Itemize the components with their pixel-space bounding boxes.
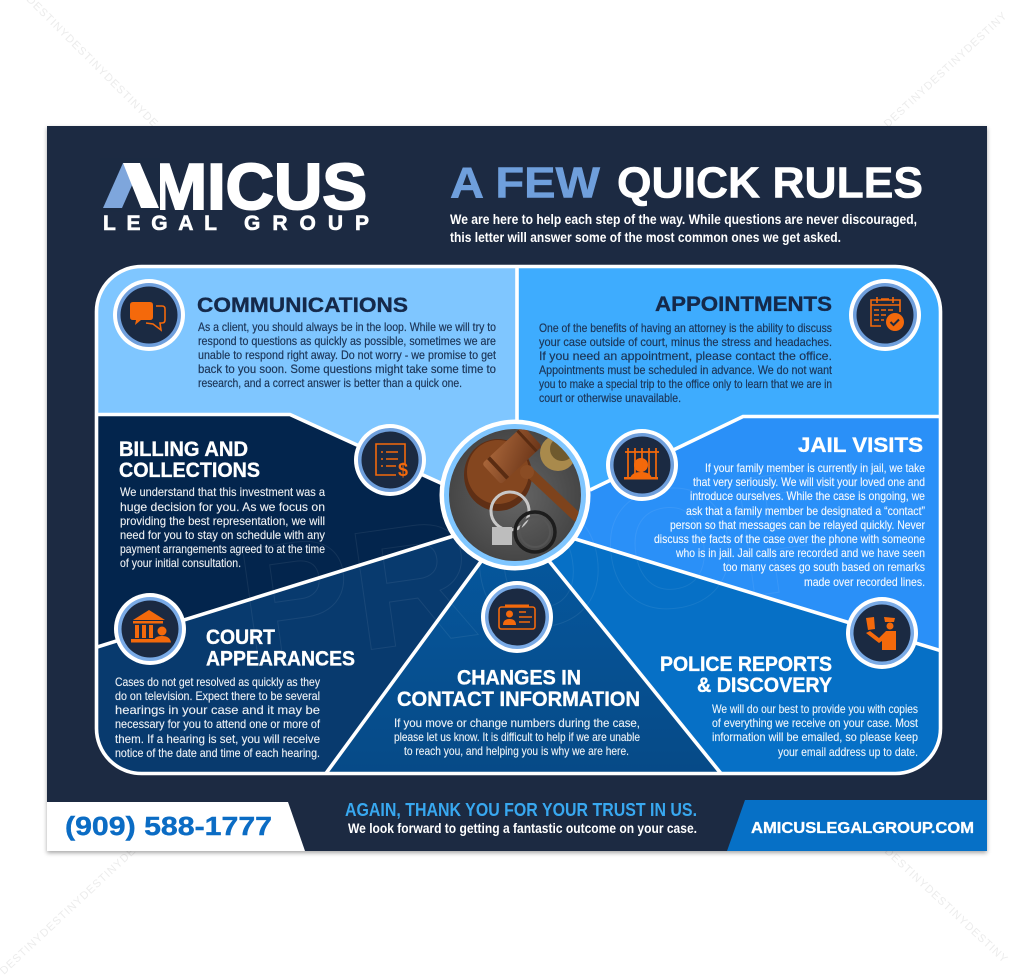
section: police reports and discovery: We will do our best to provide you with copies — [712, 702, 918, 716]
section: communications: respond to questions as quickly as possible, sometimes we are — [198, 334, 496, 348]
watermark: proof: PROOF — [227, 431, 852, 703]
section: appointments: One of the benefits of having an attorney is the ability to discuss — [539, 321, 832, 335]
section: jail visits: who is in jail. Jail calls are recorded and we have seen — [675, 546, 925, 560]
logo: Amicus Legal Group: GROUP — [244, 212, 369, 235]
watermark: destiny: DESTINYDESTINYDESTINYDESTINY — [0, 819, 166, 977]
subtitle: We are here to help each step of the way. While questions are never discouraged, — [450, 212, 917, 228]
section: police reports and discovery: POLICE REPORTS — [660, 653, 832, 676]
watermark: destiny: DESTINYDESTINYDESTINY — [882, 845, 1010, 966]
icon: invoice: $ — [398, 460, 408, 480]
panel: rules diagram — [90, 260, 950, 780]
section: jail visits: discuss the facts of the case over the phone with someone — [654, 532, 925, 546]
section: police reports and discovery: your email address up to date. — [778, 745, 918, 759]
section: police reports and discovery: & DISCOVERY — [697, 674, 832, 697]
section: communications: COMMUNICATIONS — [197, 294, 408, 317]
icon: police officer — [846, 597, 918, 669]
section: billing and collections: COLLECTIONS — [119, 459, 260, 482]
section: court appearances: COURT — [206, 626, 275, 649]
watermark: destiny: DESTINYDESTINYDESTINY — [882, 10, 1010, 130]
footer: thank you message: AGAIN, THANK YOU FOR YOUR TRUST IN US. — [345, 800, 697, 820]
section: jail visits: person so that messages can be relayed quickly. Never — [670, 518, 925, 532]
section: appointments: APPOINTMENTS — [655, 293, 832, 316]
subtitle: this letter will answer some of the most common ones we get asked. — [450, 230, 841, 246]
section: jail visits: ask that a family member be designated a “contact” — [686, 504, 925, 518]
section: billing and collections: payment arrangements agreed to at the time — [120, 542, 325, 556]
logo: Amicus Legal Group: AMICUS — [103, 150, 367, 223]
section: billing and collections: BILLING AND — [119, 438, 248, 461]
section: billing and collections: need for you to stay on schedule with any — [120, 528, 325, 542]
section: changes in contact information: If you move or change numbers during the case, — [394, 716, 640, 730]
poster background — [47, 126, 987, 851]
section: court appearances: them. If a hearing is set, you will receive — [115, 732, 320, 746]
title: QUICK RULES — [617, 158, 923, 208]
footer: phone — [47, 802, 305, 851]
section: communications: back to you soon. Some questions might take some time to — [198, 362, 496, 376]
section: appointments: Appointments must be scheduled in advance. We do not want — [539, 363, 833, 377]
section: police reports and discovery: of everything we receive on your case. Most — [712, 716, 919, 730]
section: court appearances: necessary for you to attend one or more of — [115, 717, 321, 731]
section: changes in contact information: CHANGES IN — [457, 666, 581, 690]
section: changes in contact information: please let us know. It is difficult to help if we are unable — [394, 730, 640, 744]
icon: courthouse — [114, 593, 186, 665]
section: court appearances: do on television. Expect there to be several — [115, 689, 320, 703]
icon: invoice — [354, 424, 426, 496]
panel dividers — [94, 264, 945, 776]
section: jail visits: too many cases go south based on remarks — [723, 560, 925, 574]
icon: calendar check — [849, 279, 921, 351]
icon: jail bars — [606, 429, 678, 501]
section: appointments: court or otherwise unavailable. — [539, 391, 681, 405]
section: changes in contact information: to reach you, and helping you is why we are here. — [404, 744, 629, 758]
section: billing and collections: providing the best representation, we will — [120, 514, 325, 528]
section: jail visits: introduce ourselves. While the case is ongoing, we — [690, 489, 925, 503]
section: court appearances — [114, 593, 355, 760]
section: court appearances: hearings in your case and it may be — [115, 703, 320, 717]
section: billing and collections: We understand that this investment was a — [120, 485, 325, 499]
panel backgrounds — [90, 260, 950, 780]
section: billing and collections — [119, 424, 426, 570]
section: jail visits: made over recorded lines. — [804, 575, 925, 589]
footer: website: AMICUSLEGALGROUP.COM — [751, 820, 974, 837]
section: police reports and discovery — [660, 597, 919, 759]
section: communications: unable to respond right away. Do not worry - we promise to get — [198, 348, 497, 362]
section: court appearances: APPEARANCES — [206, 648, 355, 670]
footer: website — [727, 800, 987, 851]
section: jail visits: JAIL VISITS — [798, 434, 923, 457]
section: communications — [113, 279, 497, 390]
section: court appearances: Cases do not get resolved as quickly as they — [115, 675, 320, 689]
icon: id card — [481, 581, 553, 653]
center photo: gavel and handcuffs — [440, 420, 590, 570]
section: jail visits: that very seriously. We will visit your loved one and — [693, 475, 925, 489]
section: appointments: your case outside of court, minus the stress and headaches. — [539, 335, 832, 349]
section: court appearances: notice of the date and time of each hearing. — [115, 746, 320, 760]
title: A FEW — [450, 158, 600, 208]
title — [450, 158, 923, 208]
section: billing and collections: huge decision for you. As we focus on — [120, 500, 325, 514]
logo: Amicus Legal Group: LEGAL — [103, 212, 217, 235]
section: appointments: If you need an appointment, please contact the office. — [539, 349, 832, 363]
section: changes in contact information: CONTACT INFORMATION — [397, 688, 640, 711]
footer: thank you message — [345, 800, 697, 836]
section: appointments — [539, 279, 921, 405]
footer: thank you message: We look forward to getting a fantastic outcome on your case. — [348, 820, 697, 836]
section: communications: As a client, you should always be in the loop. While we will try to — [198, 320, 496, 334]
section: communications: research, and a correct answer is better than a quick one. — [198, 376, 462, 390]
section: changes in contact information — [394, 581, 640, 758]
section: jail visits: If your family member is currently in jail, we take — [705, 461, 925, 475]
section: appointments: you to make a special trip to the office only to learn that we are in — [539, 377, 832, 391]
subtitle — [450, 212, 917, 246]
icon: speech bubbles — [113, 279, 185, 351]
section: billing and collections: of your initial consultation. — [120, 556, 241, 570]
section: police reports and discovery: information will be emailed, so please keep — [712, 730, 918, 744]
section: jail visits — [606, 429, 925, 589]
footer: phone: (909) 588-1777 — [65, 811, 272, 841]
